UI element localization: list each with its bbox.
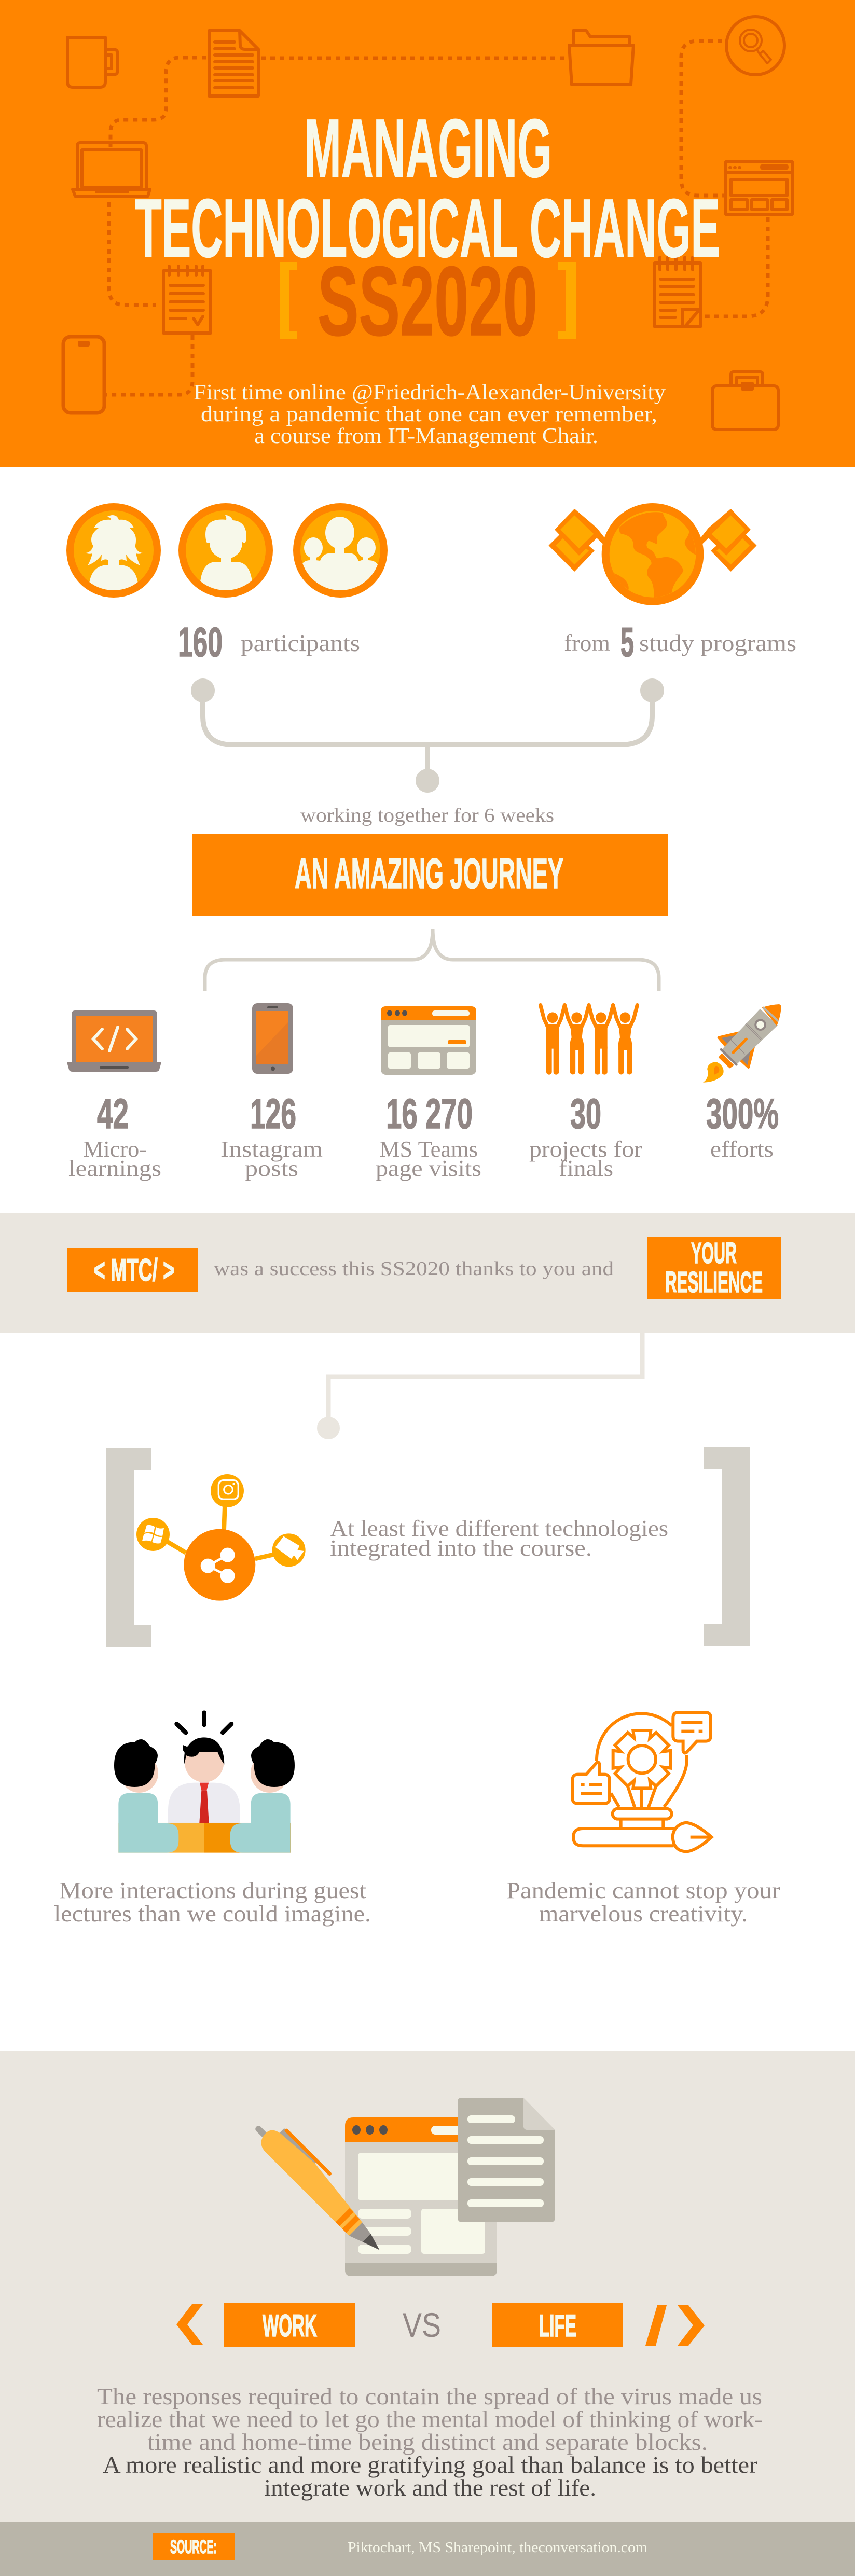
banner: an amazing journey: AN AMAZING JOURNEY: [295, 850, 563, 897]
icon: document: [209, 31, 258, 96]
stat: 126 instagram posts: 126: [250, 1090, 296, 1138]
paragraph: conclusion: A more realistic and more gratifying goal than balance is to better: [103, 2452, 757, 2478]
subtitle tag: SS2020: [280, 246, 576, 356]
tag: work: [224, 2303, 355, 2347]
stat: 16 270 page visits: MS Teams: [379, 1137, 478, 1162]
tag: source: [153, 2533, 235, 2560]
paragraph: responses: [97, 2383, 763, 2455]
tag: life: LIFE: [539, 2308, 576, 2343]
connector joining the stats: [191, 678, 664, 793]
paragraph: conclusion: [103, 2452, 757, 2501]
stat: 126 instagram posts: posts: [245, 1156, 298, 1181]
stat: 160 participants: participants: [241, 630, 360, 656]
icon: creative bulb: [572, 1712, 712, 1851]
left bracket: [106, 1448, 151, 1647]
stat: 30 projects: finals: [559, 1156, 613, 1181]
stat: 42 microlearnings: learnings: [68, 1156, 161, 1181]
stat: from 5 study programs: from: [564, 630, 610, 656]
icon: laptop outline: [73, 143, 150, 196]
connector to technologies: [317, 1333, 642, 1439]
right bracket: [704, 1447, 750, 1646]
panel: work vs life: [0, 2051, 855, 2522]
icon: group avatar: [293, 503, 388, 598]
text: five technologies: integrated into the course.: [330, 1535, 592, 1561]
stat: 160 participants: 160: [178, 619, 223, 665]
paragraph: conclusion: integrate work and the rest of life.: [264, 2474, 596, 2501]
text: interactions: [54, 1878, 371, 1927]
icon: phone outline: [63, 337, 104, 413]
stat: from 5 study programs: 5: [620, 619, 634, 665]
illustration: guest lecture: [114, 1713, 295, 1853]
tag: MTC: < MTC/ >: [94, 1253, 174, 1287]
icon: technologies hub: [136, 1474, 306, 1601]
stat: 300% efforts: efforts: [710, 1137, 774, 1162]
closing slash and chevron: [645, 2305, 705, 2346]
title: [135, 102, 720, 274]
illustration: document: [458, 2098, 555, 2222]
tag: your resilience: [647, 1237, 781, 1299]
text: interactions: More interactions during guest: [59, 1878, 366, 1903]
illustration: browser window: [345, 2117, 497, 2276]
icon: cheering team: [541, 1005, 637, 1072]
icon: folder: [569, 31, 633, 85]
stat: from 5 study programs: [564, 619, 796, 665]
banner: an amazing journey: [192, 834, 668, 916]
panel: success band: [0, 1213, 855, 1333]
stat: 42 microlearnings: [68, 1090, 161, 1181]
icon: globe with flags: [549, 503, 756, 605]
text: creativity: marvelous creativity.: [539, 1901, 748, 1927]
text: VS: VS: [403, 2306, 441, 2344]
stat: 30 projects: [529, 1090, 642, 1181]
text: creativity: [506, 1878, 780, 1927]
paragraph: responses: realize that we need to let go the mental model of thinking of work-: [97, 2406, 763, 2432]
stat: from 5 study programs: study programs: [639, 630, 796, 656]
icon: checklist notepad: [163, 266, 211, 333]
stat: 300% efforts: 300%: [706, 1090, 779, 1138]
subtitle tag: SS2020: SS2020: [318, 246, 537, 356]
text: interactions: lectures than we could imagine.: [54, 1901, 371, 1927]
text: creativity: Pandemic cannot stop your: [506, 1878, 780, 1903]
stat: 160 participants: [178, 619, 360, 665]
icon: laptop with code: [67, 1010, 161, 1072]
text: was a success: was a success this SS2020 thanks to you and: [214, 1258, 614, 1280]
text: five technologies: At least five different technologies: [330, 1516, 668, 1541]
stat: 42 microlearnings: Micro-: [83, 1137, 147, 1162]
stat: 30 projects: projects for: [529, 1137, 642, 1162]
icon: woman avatar: [66, 503, 161, 598]
left chevron: [176, 2304, 203, 2345]
title: MANAGING: [304, 102, 552, 195]
tag: MTC: [67, 1248, 198, 1292]
stat: 42 microlearnings: 42: [97, 1090, 129, 1138]
paragraph: responses: time and home-time being distinct and separate blocks.: [147, 2429, 708, 2455]
tag: life: [492, 2303, 623, 2347]
brace: [205, 929, 659, 991]
stat: 16 270 page visits: [376, 1090, 481, 1181]
intro text: [194, 381, 666, 448]
text: sources: Piktochart, MS Sharepoint, theconversation.com: [348, 2540, 647, 2556]
tag: your resilience: RESILIENCE: [665, 1266, 763, 1299]
icon: browser outline: [725, 161, 793, 215]
panel: orange header: [0, 0, 855, 467]
stat: 300% efforts: [706, 1090, 779, 1162]
icon: browser window: [381, 1006, 476, 1075]
intro text: a course from IT-Management Chair.: [254, 424, 598, 448]
icon: smartphone: [252, 1003, 293, 1074]
stat: 30 projects: 30: [570, 1090, 601, 1138]
intro text: First time online @Friedrich-Alexander-University: [194, 381, 666, 405]
illustration: pen: [248, 2114, 393, 2258]
tag: source: SOURCE:: [170, 2536, 217, 2557]
footer: [0, 2522, 855, 2576]
tag: your resilience: YOUR: [691, 1237, 737, 1270]
icon: mug: [67, 37, 118, 87]
text: working together: working together for 6 weeks: [300, 805, 554, 826]
tag: work: WORK: [263, 2308, 317, 2343]
intro text: during a pandemic that one can ever remember,: [201, 403, 657, 426]
icon: briefcase: [712, 372, 778, 430]
stat: 16 270 page visits: page visits: [376, 1156, 481, 1181]
icon: man avatar: [178, 503, 273, 598]
paragraph: responses: The responses required to contain the spread of the virus made us: [97, 2383, 762, 2409]
icon: rocket: [703, 1004, 781, 1083]
stat: 126 instagram posts: Instagram: [220, 1137, 323, 1162]
text: five technologies: [330, 1516, 668, 1561]
icon: magnifier: [726, 17, 784, 75]
icon: notepad with sticky note: [655, 257, 700, 327]
stat: 126 instagram posts: [220, 1090, 323, 1181]
stat: 16 270 page visits: 16 270: [386, 1090, 473, 1138]
dashed connectors: [105, 41, 768, 395]
